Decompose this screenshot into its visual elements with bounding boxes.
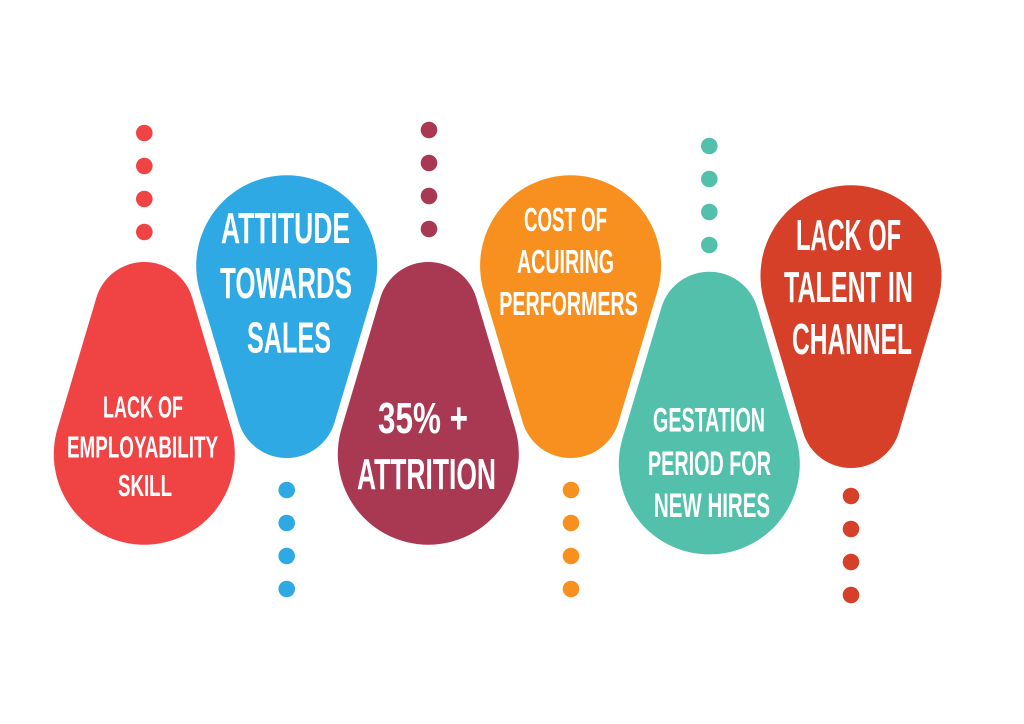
- text: attitude towards sales: SALES: [247, 314, 331, 363]
- teardrop: dark red: [760, 185, 942, 468]
- text: lack of employability skill: SKILL: [118, 468, 172, 503]
- text: gestation period for new hires: PERIOD FOR: [648, 445, 771, 483]
- text: lack of talent in channel: TALENT IN: [784, 263, 913, 312]
- text: 35% + attrition: ATTRITION: [357, 450, 496, 499]
- dots: blue: [278, 482, 295, 597]
- text: lack of talent in channel: LACK OF: [796, 211, 901, 260]
- dots: maroon: [421, 122, 437, 237]
- panel: cost of acquiring performers: [480, 175, 661, 597]
- panel: attitude towards sales: [196, 175, 377, 597]
- text: lack of employability skill: [67, 390, 218, 503]
- panel: gestation period: [619, 138, 800, 554]
- dots: dark red: [843, 488, 859, 603]
- text: cost of acuiring performers: ACUIRING: [517, 243, 614, 280]
- teardrop: teal: [619, 272, 800, 554]
- teardrop: orange: [480, 175, 661, 458]
- text: gestation period for new hires: GESTATION: [653, 402, 765, 440]
- text: attitude towards sales: ATTITUDE: [221, 204, 350, 253]
- panel: lack of employability skill: [54, 125, 235, 545]
- text: 35% + attrition: 35% +: [378, 394, 468, 443]
- text: lack of talent in channel: CHANNEL: [792, 315, 912, 364]
- teardrop: maroon: [338, 262, 519, 545]
- dots: red: [136, 125, 153, 240]
- text: cost of acuiring performers: COST OF: [524, 201, 607, 238]
- text: attitude towards sales: TOWARDS: [220, 259, 352, 308]
- text: 35% + attrition: [357, 394, 496, 499]
- dots: teal: [701, 138, 718, 253]
- text: lack of employability skill: LACK OF: [103, 390, 183, 424]
- text: gestation period for new hires: NEW HIRES: [654, 487, 770, 525]
- text: lack of talent in channel: [784, 211, 913, 364]
- text: lack of employability skill: EMPLOYABILITY: [67, 429, 218, 464]
- dots: orange: [563, 482, 579, 597]
- text: gestation period for new hires: [648, 402, 771, 525]
- text: cost of acuiring performers: PERFORMERS: [499, 285, 638, 322]
- panel: lack of talent in channel: [760, 185, 942, 603]
- panel: attrition: [338, 122, 519, 545]
- text: attitude towards sales: [220, 204, 352, 363]
- text: cost of acuiring performers: [499, 201, 638, 322]
- teardrop: red: [54, 262, 235, 545]
- teardrop: blue: [196, 175, 377, 458]
